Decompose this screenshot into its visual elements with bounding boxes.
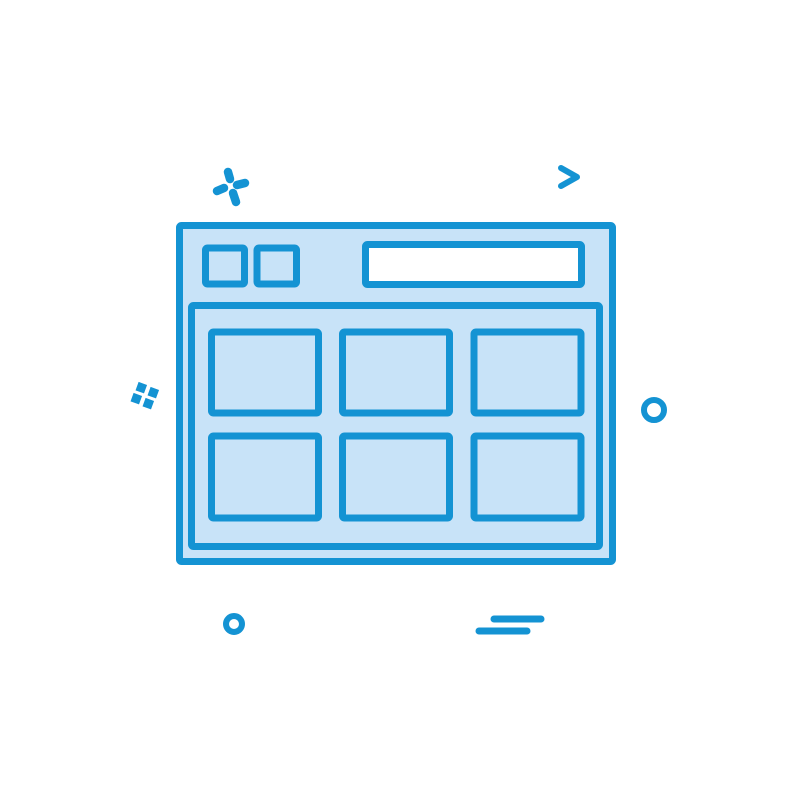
search bar [366, 244, 582, 284]
icon: window buttons [206, 248, 296, 284]
icon: checker dots [131, 382, 159, 409]
icon: sparkle [217, 172, 245, 202]
icon: speed lines [479, 619, 541, 631]
panel: content area [192, 306, 600, 546]
panel: outer window frame [180, 226, 612, 562]
grid of tiles [212, 332, 581, 518]
icon: ring bottom left [226, 616, 242, 632]
icon: ring right [644, 400, 664, 420]
icon: arrow chevron [561, 168, 577, 186]
